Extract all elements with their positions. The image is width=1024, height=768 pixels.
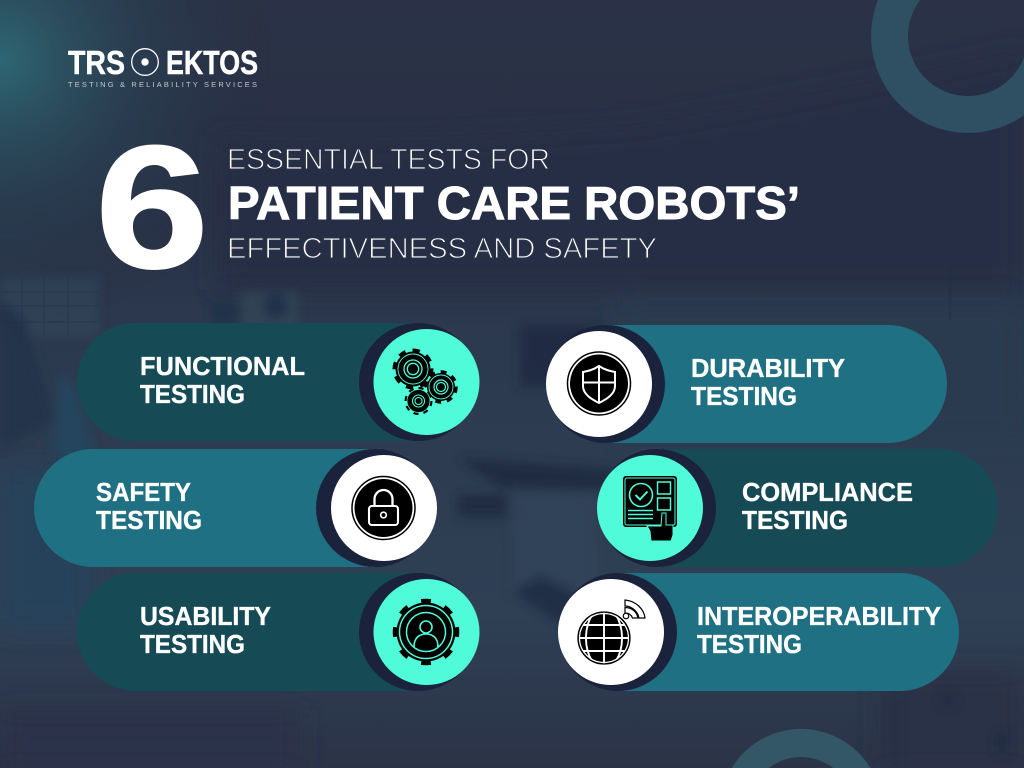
panel: safety testing	[34, 449, 437, 567]
panel: compliance testing	[597, 449, 998, 567]
panel: interoperability testing	[558, 573, 959, 691]
label: safety testing	[96, 479, 202, 535]
label: durability testing: DURABILITY	[691, 355, 845, 383]
decorative ring: bottom	[732, 729, 870, 768]
label: compliance testing	[742, 479, 913, 535]
label: safety testing: TESTING	[96, 507, 202, 535]
panel: usability testing	[77, 573, 480, 691]
label: usability testing	[140, 603, 271, 659]
logo: TRS EKTOS: TRS	[68, 44, 125, 81]
panel: functional testing	[77, 323, 480, 441]
icon: globe with wifi	[578, 600, 645, 664]
title: EFFECTIVENESS AND SAFETY	[227, 233, 657, 265]
logo: TRS EKTOS: TESTING & RELIABILITY SERVICES	[68, 80, 257, 89]
title: PATIENT CARE ROBOTS’	[228, 177, 800, 229]
big number 6: 6	[95, 110, 209, 306]
title	[227, 144, 800, 265]
label: functional testing	[140, 353, 305, 409]
logo: TRS EKTOS	[68, 44, 258, 89]
icon: shield	[568, 352, 630, 415]
decorative ring: top right	[871, 0, 1024, 133]
panel: durability testing	[546, 325, 947, 443]
label: functional testing: FUNCTIONAL	[140, 353, 305, 381]
title: ESSENTIAL TESTS FOR	[227, 144, 550, 176]
icon: checklist with hand	[623, 476, 677, 541]
label: interoperability testing: INTEROPERABILITY	[697, 603, 941, 631]
label: usability testing: USABILITY	[140, 603, 271, 631]
icon: padlock	[352, 476, 415, 540]
logo: TRS EKTOS: EKTOS	[166, 44, 258, 81]
label: safety testing: SAFETY	[96, 479, 191, 507]
label: compliance testing: TESTING	[742, 507, 848, 535]
label: interoperability testing: TESTING	[697, 631, 802, 659]
icon: gears	[394, 350, 456, 414]
icon: user gear	[395, 601, 457, 663]
label: usability testing: TESTING	[140, 631, 245, 659]
label: functional testing: TESTING	[140, 381, 245, 409]
label: compliance testing: COMPLIANCE	[742, 479, 913, 507]
label: durability testing	[691, 355, 845, 411]
label: interoperability testing	[697, 603, 941, 659]
label: durability testing: TESTING	[691, 383, 797, 411]
